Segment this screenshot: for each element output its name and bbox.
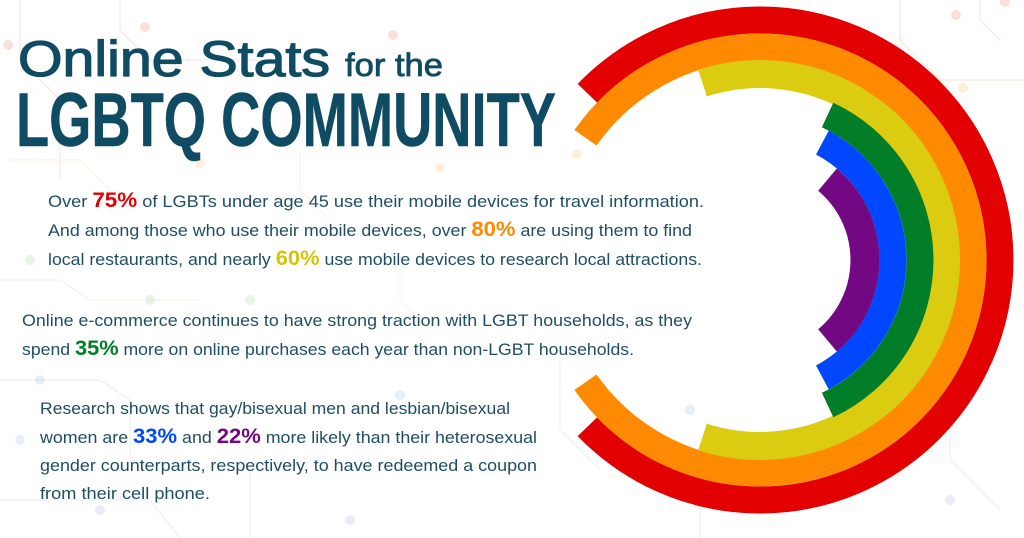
rainbow arcs: [586, 20, 1000, 500]
text block: coupons: from their cell phone.: [40, 484, 210, 503]
title: for the: [345, 47, 443, 83]
title: Online Stats: [18, 31, 330, 87]
text block: mobile travel stats: And among those who use their mobile devices, over 80% are using them to find: [48, 218, 692, 241]
text block: e-commerce: Online e-commerce continues to have strong traction with LGBT households, as they: [22, 311, 693, 330]
text block: coupons: [39, 399, 537, 503]
text block: e-commerce: spend 35% more on online purchases each year than non-LGBT households.: [22, 337, 634, 360]
text block: coupons: women are 33% and 22% more likely than their heterosexual: [39, 425, 537, 448]
text block: mobile travel stats: local restaurants, and nearly 60% use mobile devices to research local attractions.: [48, 247, 702, 270]
title: [16, 31, 556, 163]
title: LGBTQ COMMUNITY: [16, 78, 556, 163]
text block: coupons: Research shows that gay/bisexual men and lesbian/bisexual: [40, 399, 510, 418]
text block: e-commerce: [22, 311, 693, 360]
text block: mobile travel stats: Over 75% of LGBTs under age 45 use their mobile devices for travel information.: [48, 189, 704, 212]
text block: coupons: gender counterparts, respectively, to have redeemed a coupon: [40, 456, 537, 475]
text block: mobile travel stats: [48, 189, 704, 270]
